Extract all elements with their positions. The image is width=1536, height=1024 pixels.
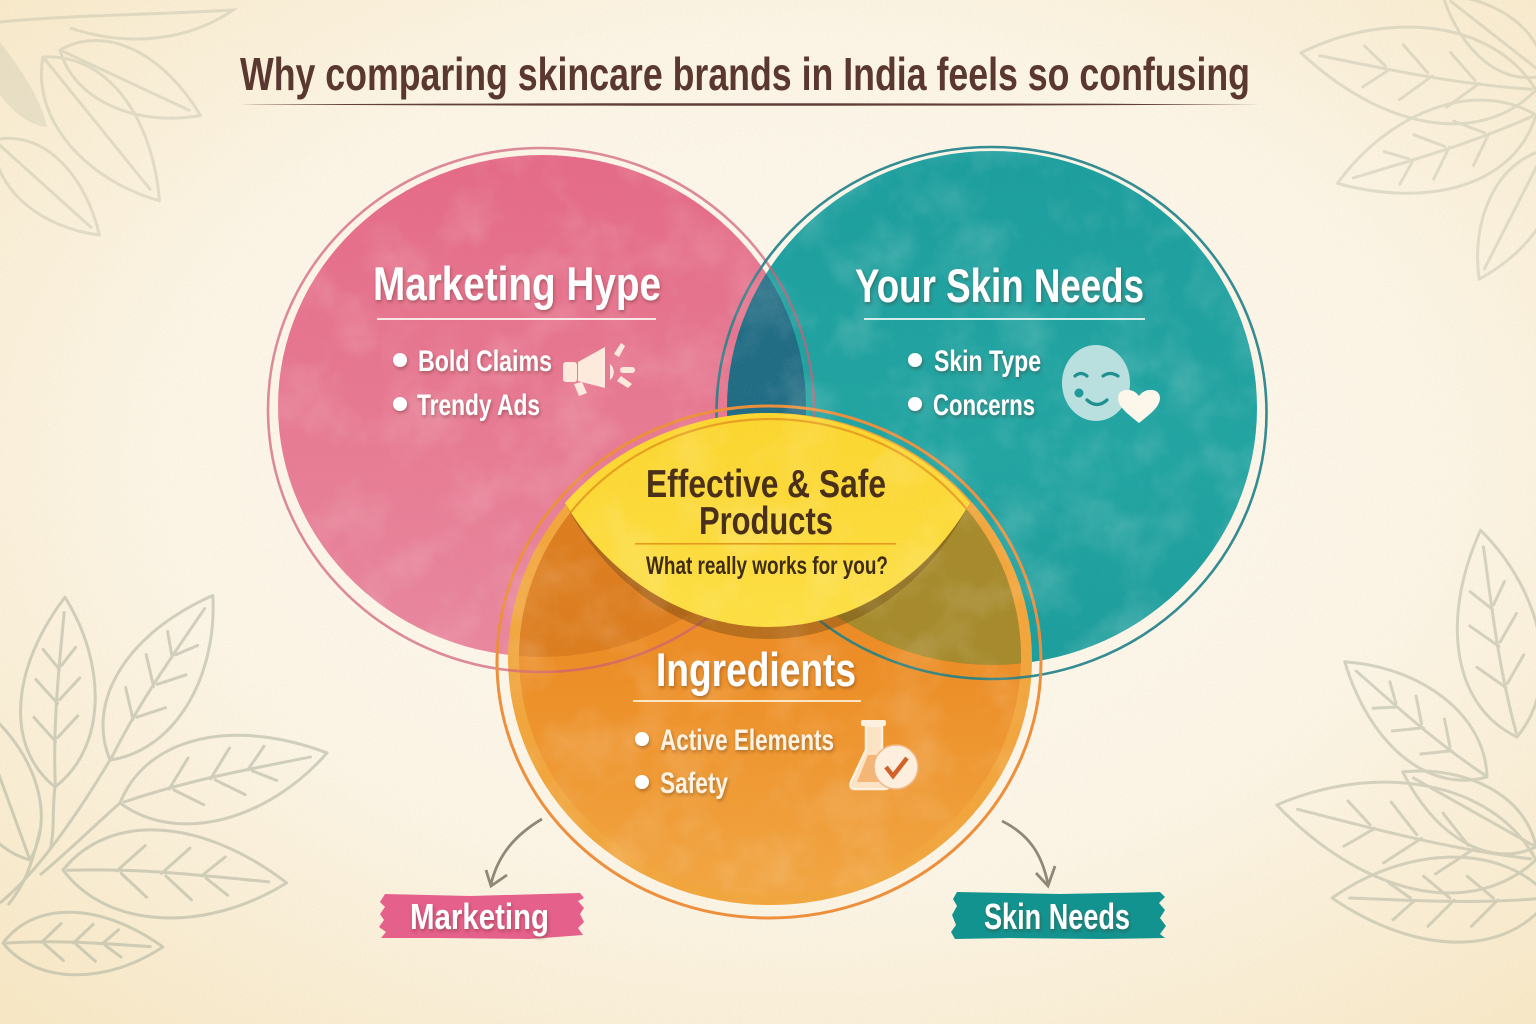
bullet list: [908, 345, 1041, 422]
brush stroke: pink: [379, 893, 584, 939]
title: Why comparing skincare brands in India feels so confusing: [240, 48, 1250, 100]
leaves: bottom left: [0, 575, 336, 977]
label: marketing: [379, 893, 584, 939]
bullet list: Trendy Ads: [417, 389, 540, 422]
subheading: What really works for you?: [646, 552, 888, 580]
lens inner arc: [570, 418, 967, 513]
heading: ingredients: Ingredients: [656, 643, 856, 696]
bullet list: Safety: [660, 767, 728, 800]
leaves: bottom right: [1266, 523, 1536, 942]
arrow: to marketing: [486, 819, 542, 886]
overlap: skin needs and ingredients: [836, 509, 1021, 665]
panel: effective and safe products: [635, 463, 896, 580]
circle: ingredients rim: [508, 413, 1032, 905]
heading rule: [633, 700, 861, 702]
circle: marketing hype: [278, 155, 806, 657]
centre lens: [565, 413, 970, 627]
heading rule: [377, 318, 656, 320]
circle: ingredients: [519, 419, 1021, 895]
panel: your skin needs: [855, 259, 1160, 423]
lens rule: [635, 543, 896, 545]
heading: your skin needs: Your Skin Needs: [855, 259, 1144, 312]
watercolor grain over circles: [537, 152, 1257, 710]
outline: your skin needs: [716, 147, 1266, 679]
heading: marketing hype: Marketing Hype: [373, 257, 661, 310]
panel: ingredients: [633, 643, 918, 800]
heading: effective and safe: Effective & Safe: [646, 463, 886, 506]
watercolor blotches over circles: [260, 140, 1280, 930]
brush stroke: teal: [951, 892, 1166, 939]
leaves: top right: [1293, 0, 1536, 293]
icon: megaphone: [563, 343, 635, 396]
outline: ingredients: [497, 406, 1041, 918]
bullet list: [393, 345, 552, 422]
heading: products: Products: [699, 500, 833, 543]
arrow: to skin needs: [1002, 821, 1055, 886]
bullet list: Concerns: [933, 389, 1035, 422]
bullet list: Skin Type: [934, 345, 1041, 378]
shadow under centre lens: [565, 413, 970, 639]
venn diagram: [268, 147, 1266, 918]
bullet list: Bold Claims: [418, 345, 552, 378]
leaves: top left: [0, 10, 233, 255]
circle: your skin needs: [727, 151, 1257, 665]
overlap: marketing and skin needs: [727, 274, 806, 416]
icon: flask with check: [850, 720, 918, 789]
heading rule: [864, 318, 1145, 320]
label: skin needs: [951, 892, 1166, 939]
icon: face and heart: [1062, 345, 1160, 423]
bullet list: [635, 724, 834, 800]
label text: Skin Needs: [984, 896, 1130, 937]
overlap: marketing and ingredients: [519, 513, 692, 657]
title underline: [240, 103, 1261, 106]
bullet list: Active Elements: [660, 724, 834, 757]
panel: marketing hype: [373, 257, 661, 422]
outline: marketing hype: [268, 148, 814, 672]
label text: Marketing: [410, 896, 549, 937]
